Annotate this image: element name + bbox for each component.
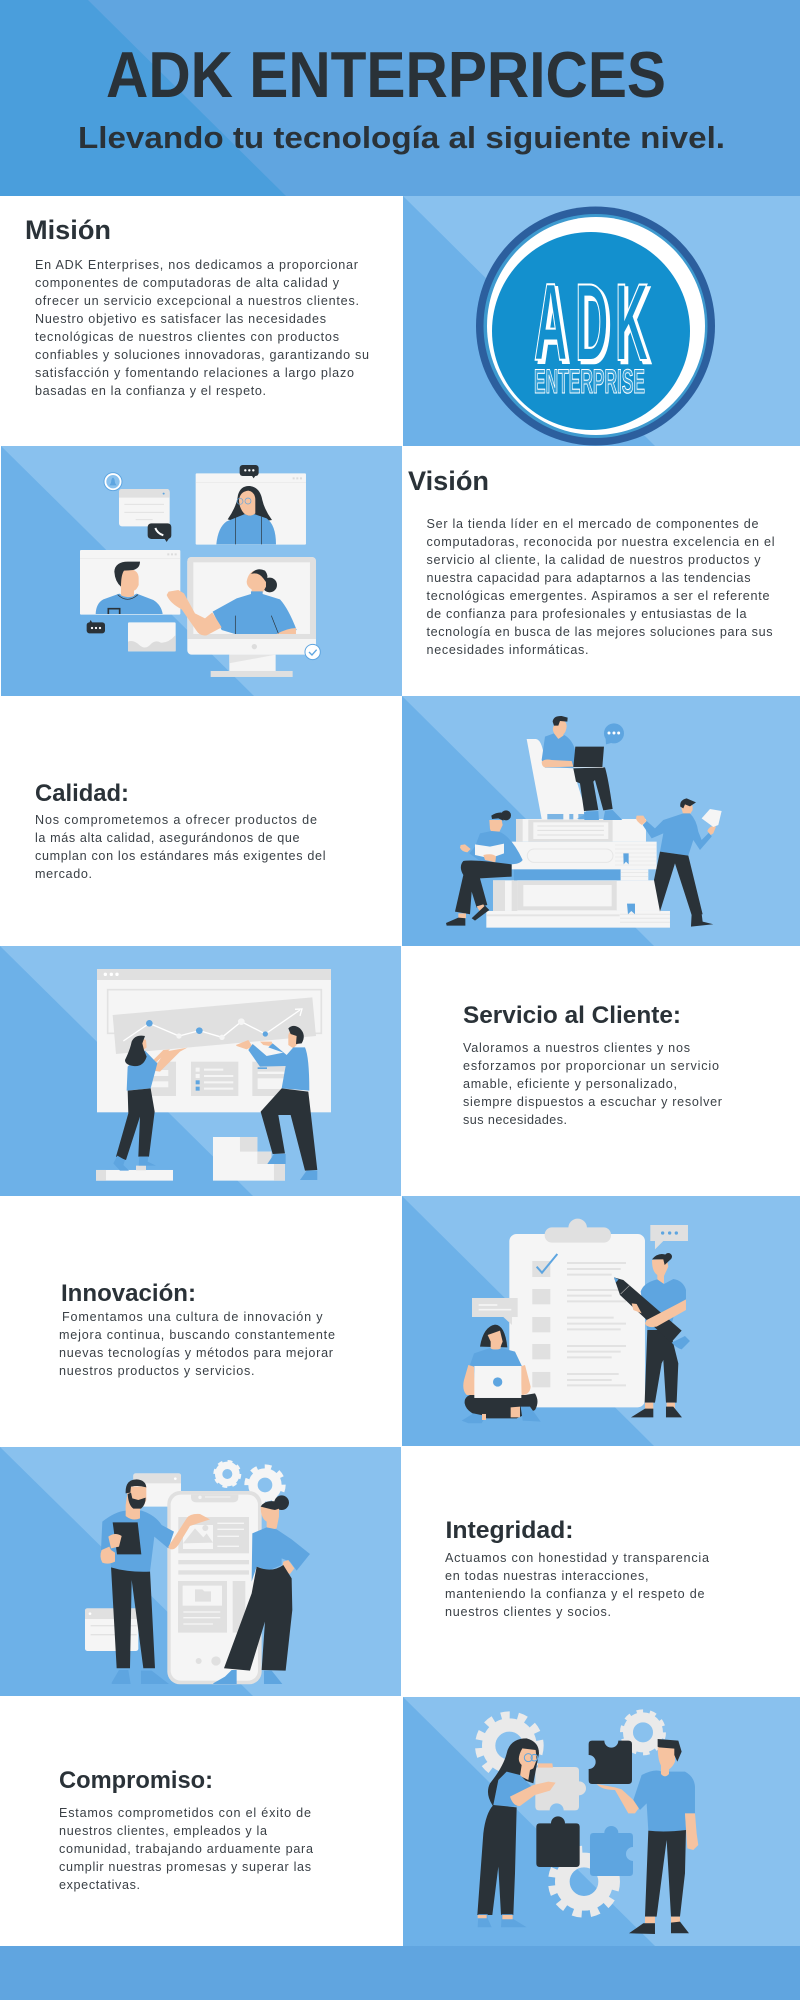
text block: Integridad: Actuamos con honestidad y transparencia xyxy=(445,1551,709,1565)
text block: Compromiso: expectativas. xyxy=(59,1878,140,1892)
text block: Misión: basadas en la confianza y el respeto. xyxy=(35,384,266,398)
clipboard xyxy=(509,1219,645,1407)
text block: Visión: tecnología en busca de las mejores soluciones para sus xyxy=(426,625,772,639)
window: woman on call xyxy=(196,473,306,545)
text block: Servicio: Valoramos a nuestros clientes y nos xyxy=(463,1041,690,1055)
window: man on call xyxy=(80,550,180,615)
steps xyxy=(96,1137,285,1181)
text block: Visión: servicio al cliente, la calidad de nuestros productos y xyxy=(426,553,761,567)
panel: Compromiso illustration xyxy=(403,1697,800,1946)
text block: Visión xyxy=(426,517,774,657)
heading: Visión: Visión xyxy=(408,466,489,496)
person: woman hand on hip xyxy=(213,1495,310,1684)
text block: Integridad xyxy=(445,1551,709,1619)
puzzle: dark bottom piece xyxy=(536,1816,580,1867)
text block: Misión: componentes de computadoras de alta calidad y xyxy=(35,276,340,290)
card: notification xyxy=(119,489,170,526)
text block: Misión: Nuestro objetivo es satisfacer las necesidades xyxy=(35,312,326,326)
bubble: small dots xyxy=(87,620,105,633)
window: top xyxy=(133,1473,181,1507)
smartphone xyxy=(167,1491,262,1684)
panel: Compromiso text xyxy=(59,1767,313,1892)
person: woman reading xyxy=(446,810,523,926)
heading: Integridad: Integridad: xyxy=(446,1517,574,1544)
icon: phone bubble xyxy=(148,523,171,542)
panel: Visión text xyxy=(408,466,774,657)
header band xyxy=(0,0,800,196)
panel: Calidad text xyxy=(35,780,326,881)
text block: Calidad: Nos comprometemos a ofrecer productos de xyxy=(35,813,317,827)
text block: Calidad: cumplan con los estándares más exigentes del xyxy=(35,849,326,863)
panel: Misión text xyxy=(25,215,369,398)
icon: bell xyxy=(104,473,122,491)
text block: Misión: tecnológicas de nuestros clientes con productos xyxy=(35,330,339,344)
monitor xyxy=(167,557,316,677)
text block: Calidad: mercado. xyxy=(35,867,92,881)
heading: Servicio al Cliente: Servicio al Cliente: xyxy=(463,1002,681,1029)
heading: Innovación: Innovación: xyxy=(61,1280,196,1307)
text block: Visión: nuestra capacidad para adaptarnos a las tendencias xyxy=(426,571,750,585)
text block: Innovación: mejora continua, buscando constantemente xyxy=(59,1328,335,1342)
text block: Calidad: la más alta calidad, asegurándonos de que xyxy=(35,831,300,845)
panel: Integridad illustration xyxy=(0,1447,401,1696)
text block: Visión: tecnológicas emergentes. Aspiramos a ser el referente xyxy=(426,589,770,603)
text block: Compromiso: Estamos comprometidos con el éxito de xyxy=(59,1806,311,1820)
icon: gears xyxy=(479,1712,664,1914)
text block: Visión: de confianza para profesionales y entusiastas de la xyxy=(426,607,746,621)
text block: Misión: confiables y soluciones innovadoras, garantizando su xyxy=(35,348,369,362)
title: ADK ENTERPRICES xyxy=(106,38,666,111)
text block: Servicio xyxy=(463,1041,722,1127)
person: man holding puzzle xyxy=(597,1739,698,1934)
browser window with line chart xyxy=(97,969,331,1112)
chart card xyxy=(128,622,176,651)
icon: gears xyxy=(215,1462,283,1503)
puzzle: blue piece xyxy=(590,1826,633,1876)
bubble: right xyxy=(650,1225,688,1249)
panel: Innovación illustration xyxy=(402,1196,800,1446)
illustration: puzzle team xyxy=(477,1712,698,1934)
illustration: people on books xyxy=(446,716,722,928)
text block: Servicio: amable, eficiente y personalizado, xyxy=(463,1077,677,1091)
puzzle: dark top piece xyxy=(589,1741,632,1784)
person: woman with glasses xyxy=(477,1738,556,1927)
text block: Innovación: nuestros productos y servicios. xyxy=(59,1364,254,1378)
subtitle: Llevando tu tecnología al siguiente nivel. xyxy=(78,120,725,155)
bubble: blue dots xyxy=(604,723,624,744)
illustration: chart team xyxy=(96,969,331,1181)
illustration: checklist xyxy=(462,1219,690,1423)
panel: Servicio text xyxy=(463,1002,722,1127)
panel: Servicio illustration xyxy=(0,946,401,1196)
book stack xyxy=(486,819,670,928)
illustration: video calls xyxy=(80,465,320,677)
person: bearded man with tablet xyxy=(100,1479,210,1684)
text block: Servicio: sus necesidades. xyxy=(463,1113,567,1127)
text block: Servicio: esforzamos por proporcionar un servicio xyxy=(463,1059,719,1073)
person: woman with pencil xyxy=(614,1253,690,1417)
text block: Compromiso: nuestros clientes, empleados y la xyxy=(59,1824,267,1838)
person: man reading xyxy=(636,798,722,927)
text block: Compromiso: comunidad, trabajando arduamente para xyxy=(59,1842,313,1856)
bubble: dots xyxy=(240,465,259,478)
text block: Visión: Ser la tienda líder en el mercado de componentes de xyxy=(426,517,758,531)
text block: Integridad: nuestros clientes y socios. xyxy=(445,1605,611,1619)
puzzle: light piece xyxy=(535,1767,586,1810)
text block: Compromiso xyxy=(59,1806,313,1892)
panel: Innovación text xyxy=(59,1280,335,1378)
logo: ADK Enterprise badge: ADK xyxy=(534,261,648,383)
text block: Innovación: Fomentamos una cultura de innovación y xyxy=(62,1310,323,1324)
bubble: left xyxy=(472,1298,518,1325)
heading: Misión: Misión xyxy=(25,215,111,245)
text block: Innovación xyxy=(59,1310,335,1378)
panel: logo xyxy=(403,196,800,446)
illustration: phone team xyxy=(85,1462,310,1684)
text block: Misión: En ADK Enterprises, nos dedicamos a proporcionar xyxy=(35,258,358,272)
logo: ADK Enterprise badge xyxy=(476,206,715,446)
footer band xyxy=(0,1946,800,2000)
panel: Integridad text xyxy=(445,1517,709,1619)
window: bottom xyxy=(85,1608,138,1651)
logo: ADK Enterprise badge: ADK xyxy=(537,264,651,386)
panel: Calidad illustration xyxy=(402,696,800,946)
text block: Integridad: en todas nuestras interacciones, xyxy=(445,1569,648,1583)
text block: Innovación: nuevas tecnologías y métodos para mejorar xyxy=(59,1346,333,1360)
icon: check badge xyxy=(305,644,320,660)
text block: Integridad: manteniendo la confianza y el respeto de xyxy=(445,1587,704,1601)
text block: Compromiso: cumplir nuestras promesas y superar las xyxy=(59,1860,311,1874)
text block: Visión: computadoras, reconocida por nuestra excelencia en el xyxy=(426,535,774,549)
person: woman on monitor xyxy=(167,569,297,636)
heading: Calidad: Calidad: xyxy=(35,780,129,807)
person: man on chair with laptop xyxy=(527,716,622,820)
text block: Misión: ofrecer un servicio excepcional a nuestros clientes. xyxy=(35,294,359,308)
person: woman with laptop xyxy=(462,1325,541,1423)
person: woman lifting xyxy=(113,1036,187,1171)
panel: Visión illustration xyxy=(1,446,402,696)
text block: Misión: satisfacción y fomentando relaciones a largo plazo xyxy=(35,366,354,380)
heading: Compromiso: Compromiso: xyxy=(59,1767,213,1794)
logo: ADK Enterprise badge: ENTERPRISE xyxy=(534,363,645,401)
text block: Visión: necesidades informáticas. xyxy=(426,643,588,657)
text block: Servicio: siempre dispuestos a escuchar y resolver xyxy=(463,1095,722,1109)
text block: Calidad xyxy=(35,813,326,881)
text block: Misión xyxy=(35,258,369,398)
person: man lifting xyxy=(236,1026,317,1180)
